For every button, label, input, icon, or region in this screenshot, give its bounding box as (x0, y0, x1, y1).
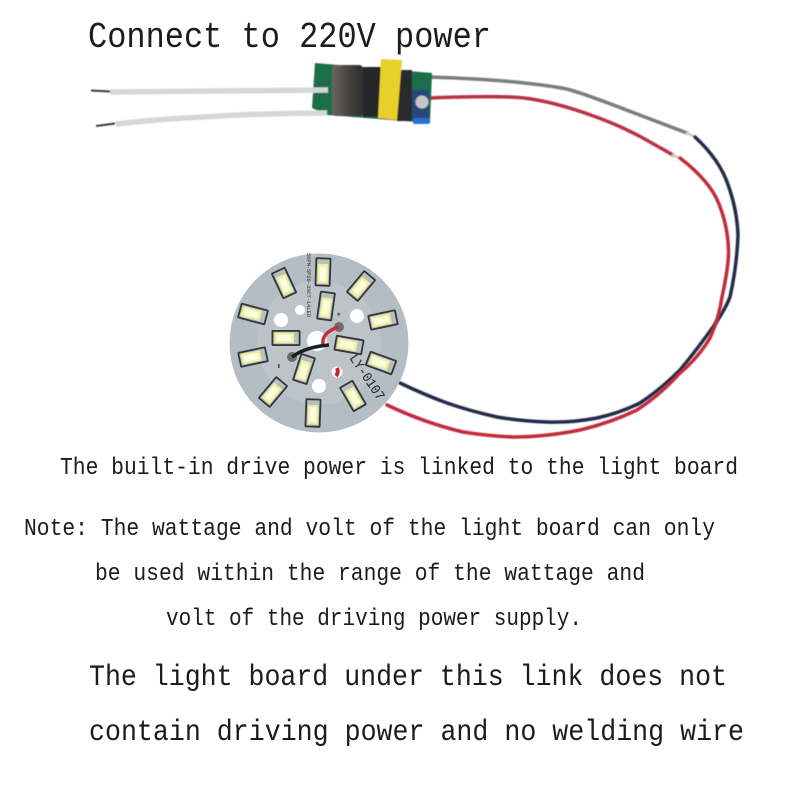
dark component (397, 70, 412, 121)
input wire: top white lead (91, 90, 328, 92)
note text block: be used within the range of the wattage and (95, 561, 645, 588)
polarity mark: minus (278, 364, 280, 368)
note text block: Note: The wattage and volt of the light board can only (24, 516, 715, 543)
LED light board (230, 253, 408, 432)
LEDs: outer ring (237, 257, 399, 428)
heading: connect to 220V power: Connect to 220V power (88, 17, 491, 58)
yellow transformer (378, 59, 402, 120)
closing statement text block: The light board under this link does not (89, 661, 727, 695)
solder pad: negative (287, 352, 297, 362)
polarity mark: plus: * (336, 312, 341, 322)
note text block (24, 516, 715, 633)
wire: gray driver output to black lead (400, 77, 738, 422)
input wire: bottom white lead (96, 113, 327, 126)
black jumper wire (292, 345, 329, 357)
solder pad: positive (334, 322, 344, 332)
wire: red driver output to red lead (387, 97, 729, 437)
board label: LY-0107: LY-0107 (345, 352, 387, 404)
circuit board (312, 63, 432, 123)
mounting holes (274, 305, 364, 393)
capacitor (332, 65, 363, 116)
red wire through hole (336, 368, 338, 376)
red jumper wire (323, 327, 338, 345)
LED driver module (91, 59, 432, 126)
note text block: volt of the driving power supply. (166, 606, 582, 633)
inductor (363, 67, 381, 117)
blue small capacitor (412, 90, 430, 124)
board spec text: 5OPM-5P20-3SCT-14LED (305, 253, 312, 318)
board disc (230, 254, 408, 432)
LEDs: inner ring (272, 291, 365, 385)
board inner shade (257, 281, 381, 405)
closing statement text block (89, 661, 744, 750)
